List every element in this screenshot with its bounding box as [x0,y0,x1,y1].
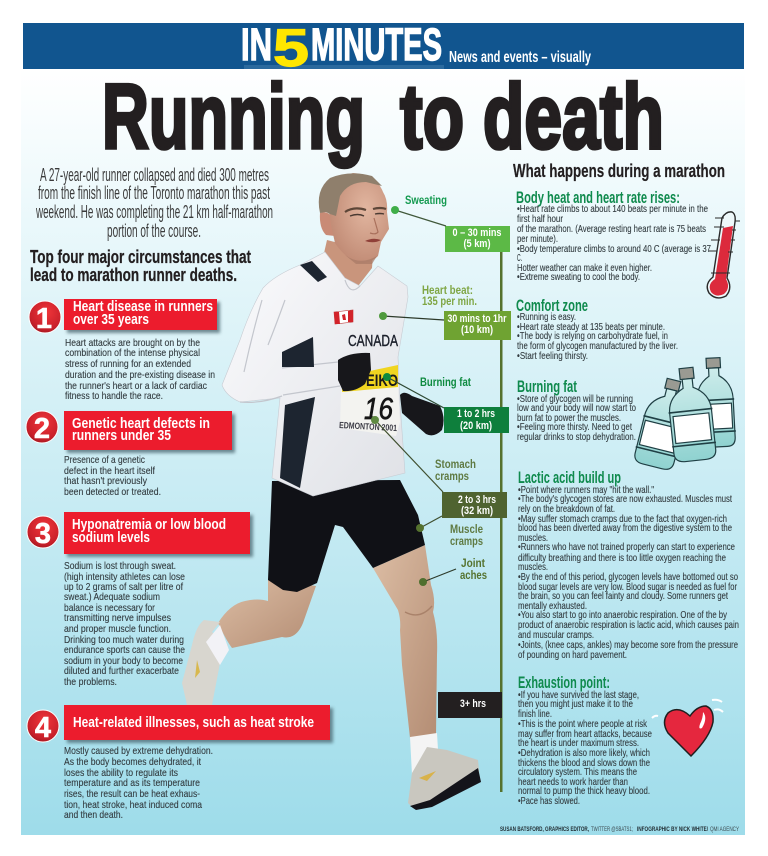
number badge 3: 3 [35,518,51,550]
callout: stomach cramps: Stomach [435,459,476,471]
timeline stage: 3+ hrs: 3+ hrs [460,698,486,710]
section: body heat: •Heart rate climbs to about 140 beats per minute in the [517,203,708,215]
title: Running [102,66,365,168]
section: comfort zone: •The body is relying on carbohydrate fuel, in [517,330,668,342]
number badge 2: 2 [34,413,50,445]
header banner: MINUTES [311,19,442,70]
credit line: QMI AGENCY [710,827,739,833]
body text 3: sodium in your body to become [64,655,183,667]
callout: sweating: Sweating [405,195,447,207]
number badge 1 [29,301,61,335]
section: lactic acid build up: rely on the breakdown of fat. [518,503,615,515]
callout: joint aches: Joint [461,558,485,570]
back leg [218,578,316,648]
title [102,66,664,168]
timeline stage: 1 to 2 hrs: (20 km) [460,420,492,432]
section: burning fat: Burning fat [517,377,577,396]
section: burning fat: burn fat to power the muscles. [517,412,621,424]
section: exhaustion point: Exhaustion point: [518,673,610,692]
heading: top four circumstances: Top four major circumstances that [30,247,251,267]
body text 3 [64,560,185,688]
section: body heat: per minute). [517,233,558,245]
section: exhaustion point: then you might just make it to the [518,698,633,710]
section: exhaustion point: the heart is under maximum stress. [518,737,639,749]
section: burning fat [517,377,636,443]
body text 1: duration and the pre-existing disease in [65,369,215,381]
section: body heat: •Extreme sweating to cool the body. [517,271,640,283]
header banner: 5 [273,19,309,78]
runner photo illustration: EIKO [366,371,398,390]
body text 1: the runner's heart or a lack of cardiac [65,380,207,392]
circumstance 3 [27,512,253,688]
credit line: INFOGRAPHIC BY NICK WHITE/ [637,827,708,833]
section: body heat: Body heat and heart rate rises: [516,188,680,207]
body text 4: loses the ability to regulate its [64,767,178,779]
body text 1: Heart attacks are brought on by the [65,337,200,349]
body text 3: balance is necessary for [64,602,155,614]
body text 3: up to 2 grams of salt per litre of [64,581,183,593]
number badge 4: 4 [35,712,51,744]
header banner: IN [241,19,272,70]
timeline stage: 3+ hrs [438,692,502,718]
body text 4: rises, the result can be heat exhaus- [64,788,200,800]
timeline stage: 30 mins to 1hr [444,311,511,340]
hair [319,173,382,216]
red heading 3: sodium levels [72,530,150,546]
timeline [438,226,511,792]
body text 4: As the body becomes dehydrated, it [64,756,201,768]
body text 4 [64,745,213,821]
callout: heart beat: 135 per min. [422,296,477,308]
section: lactic acid build up: •Point where runners may "hit the wall." [518,484,654,496]
icon: heart [652,700,723,756]
section: lactic acid build up: and muscular cramps. [518,629,594,641]
runner photo illustration: EDMONTON 2001 [339,420,397,433]
section: body heat: Hotter weather can make it even higher. [517,262,652,274]
section: comfort zone [516,296,678,362]
race bib [340,385,400,436]
callout: stomach cramps [371,416,476,492]
section: exhaustion point: •Dehydration is also more likely, which [518,747,650,759]
timeline stage: 1 to 2 hrs: 1 to 2 hrs [457,408,495,420]
callout: burning fat [383,373,471,408]
section: burning fat: •Feeling more thirsty. Need to get [517,421,632,433]
runner photo illustration [182,173,481,810]
front leg [373,545,437,738]
body text 2: defect in the heart itself [64,465,155,477]
intro text [35,164,273,241]
head [328,173,389,263]
section: burning fat: regular drinks to stop dehydration. [517,431,636,443]
intro text: A 27-year-old runner collapsed and died 300 metres [40,164,269,185]
credit line: SUSAN BATSFORD, GRAPHICS EDITOR, [500,827,589,833]
section: exhaustion point: finish line. [518,708,552,720]
body text 2: that hasn't previously [64,475,148,487]
heading: top four circumstances [30,247,251,285]
section: comfort zone: •Start feeling thirsty. [517,350,588,362]
runner photo illustration: 16 [364,391,394,426]
timeline stage: 0-30 mins: 0 – 30 mins [452,227,502,239]
red heading 1: Heart disease in runners [73,299,213,315]
timeline stage: 30 mins to 1hr: 30 mins to 1hr [448,313,507,325]
body text 3: transmitting nerve impulses [64,612,171,624]
canada text on shirt: CANADA [348,333,398,350]
body text 3: and proper muscle function. [64,623,171,635]
timeline stage: 2 to 3 hrs [442,492,507,518]
red heading 4: Heat-related illnesses, such as heat stroke [73,715,314,731]
section: burning fat: •Store of glycogen will be running [517,393,633,405]
flag [334,310,353,324]
red heading 1 [64,299,220,333]
section: lactic acid build up [518,468,739,661]
back shoe [182,620,228,705]
face features [345,208,386,212]
section: lactic acid build up: mentally exhausted. [518,600,587,612]
body text 2: Presence of a genetic [64,454,145,466]
icon: water bottles [632,357,737,471]
intro text: from the finish line of the Toronto marathon this past [38,182,270,203]
front sock [410,733,438,775]
section: comfort zone: •Heart rate steady at 135 beats per minute. [517,321,665,333]
red heading 3 [64,512,253,557]
circumstance 1 [29,299,220,402]
body text 3: diluted and further exacerbate [64,665,179,677]
number badge 1: 1 [36,303,52,335]
credit line [500,827,739,833]
body text 3: (high intensity athletes can lose [64,571,185,583]
timeline stage: 1 to 2 hrs [444,407,509,433]
section: body heat: first half hour [517,213,563,225]
callout: joint aches: aches [460,570,487,582]
callout: burning fat: Burning fat [420,377,471,389]
section: lactic acid build up: of pounding on hard pavement. [518,649,627,661]
section: comfort zone: •Running is easy. [517,311,576,323]
section: body heat [516,188,711,283]
neck [322,240,373,290]
shirt dark panels [280,261,327,488]
callout: muscle cramps: cramps [450,536,483,548]
section: burning fat: low and your body will now start to [517,402,636,414]
red heading 3: Hyponatremia or low blood [72,517,226,533]
timeline stage: 30 mins to 1hr: (10 km) [461,324,493,336]
section: body heat: C. [517,252,522,264]
section: exhaustion point [518,673,652,807]
callout: heart beat [379,285,477,320]
ear [320,212,335,236]
header banner: News and events – visually [449,49,591,66]
red heading 2: runners under 35 [72,428,171,444]
circumstance 2 [26,411,235,498]
shirt and sleeve [222,252,408,496]
body text 4: Mostly caused by extreme dehydration. [64,745,213,757]
body text 3: endurance sports can cause the [64,644,185,656]
section: exhaustion point: heart needs to work harder than [518,776,628,788]
timeline stage: 2 to 3 hrs: 2 to 3 hrs [458,494,496,506]
intro text: portion of the course. [107,220,201,241]
body text 1: combination of the intense physical [65,347,200,359]
front shoe [408,747,480,809]
section: exhaustion point: thickens the blood and slows down the [518,757,650,769]
body text 1: fitness to handle the race. [65,390,163,402]
icon: thermometer [707,212,740,298]
body text 1: stress of running for an extended [65,358,191,370]
intro text: weekend. He was completing the 21 km half-marathon [35,201,273,222]
red heading 2: Genetic heart defects in [72,416,210,432]
section: exhaustion point: •Pace has slowed. [518,795,580,807]
body text 3: Drinking too much water during [64,634,184,646]
body text 2: been detected or treated. [64,486,161,498]
sleeve folds [240,280,360,402]
number badge 4 [27,710,59,744]
section: comfort zone: the form of glycogen manufactured by the liver. [517,340,678,352]
section: exhaustion point: •If you have survived the last stage, [518,689,639,701]
section: exhaustion point: circulatory system. This means the [518,766,637,778]
red heading 2 [64,411,235,453]
section: lactic acid build up: Lactic acid build up [518,468,621,487]
timeline stage: 2 to 3 hrs: (32 km) [461,505,493,517]
body text 4: tion, heat stroke, heat induced coma [64,799,202,811]
callout: joint aches [419,558,487,586]
timeline stage: 0-30 mins [445,226,510,252]
body text 2 [64,454,161,498]
title: to death [400,66,664,168]
shorts [268,480,425,592]
section: lactic acid build up: muscles. [518,532,548,544]
number badge 2 [26,411,58,445]
section: body heat: of the marathon. (Average resting heart rate is 75 beats [517,223,706,235]
body text 1 [65,337,215,402]
callout: muscle cramps [416,516,483,548]
body text 4: and then death. [64,809,123,821]
number badge 3 [27,516,59,550]
heading: top four circumstances: lead to marathon runner deaths. [30,265,237,285]
credit line: TWITTER @SBATS1; [591,827,633,833]
gloves [338,353,444,435]
body text 3: Sodium is lost through sweat. [64,560,176,572]
timeline stage: 0-30 mins: (5 km) [464,238,491,250]
section: exhaustion point: normal to pump the thick heavy blood. [518,785,650,797]
callout: sweating [391,195,447,226]
red heading 1: over 35 years [73,312,149,328]
callout: muscle cramps: Muscle [450,524,483,536]
red heading 4 [64,705,333,743]
section: lactic acid build up: muscles. [518,561,548,573]
body text 3: sweat.) Adequate sodium [64,591,160,603]
body text 3: the problems. [64,676,117,688]
section: exhaustion point: may suffer from heart attacks, because [518,728,652,740]
section: exhaustion point: •This is the point where people at risk [518,718,648,730]
callout: stomach cramps: cramps [435,471,469,483]
circumstance 4 [27,705,333,821]
section: comfort zone: Comfort zone [516,296,588,315]
body text 4: temperature and as its temperature [64,777,200,789]
header banner [23,19,744,78]
callout: heart beat: Heart beat: [422,285,473,297]
